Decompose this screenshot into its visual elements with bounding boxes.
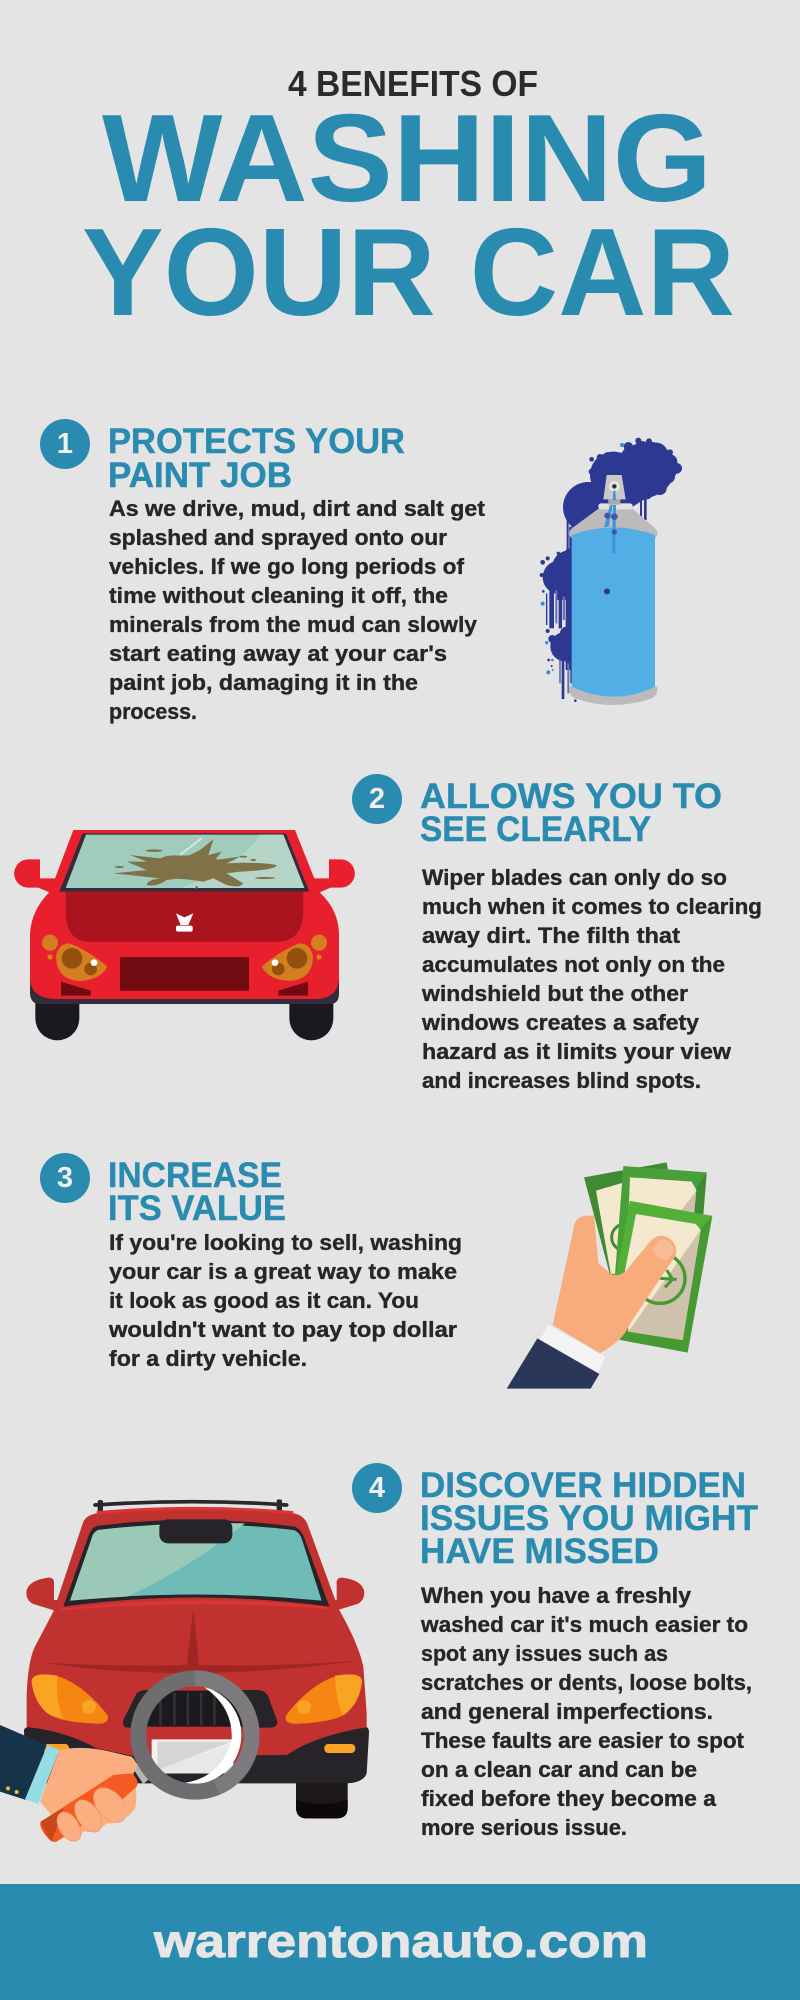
- number badge 4: [352, 1463, 402, 1513]
- body text 3: wouldn't want to pay top dollar: [108, 1317, 457, 1342]
- body text 4: on a clean car and can be: [421, 1757, 697, 1782]
- body text 2: [421, 865, 762, 1093]
- number badge 4: 4: [369, 1472, 385, 1504]
- body text 1: process.: [109, 699, 197, 724]
- title: [82, 63, 735, 342]
- panel: discover hidden issues: [0, 1463, 758, 1845]
- body text 1: splashed and sprayed onto our: [109, 525, 447, 550]
- footer bar with website: [0, 1884, 800, 2000]
- body text 1: paint job, damaging it in the: [109, 670, 418, 695]
- body text 4: scratches or dents, loose bolts,: [421, 1670, 752, 1695]
- number badge 1: [40, 419, 90, 469]
- body text 4: These faults are easier to spot: [421, 1728, 745, 1753]
- number badge 3: 3: [57, 1162, 73, 1194]
- heading 4: HAVE MISSED: [420, 1532, 659, 1571]
- title: 4 BENEFITS OF: [288, 63, 538, 104]
- body text 1: [109, 496, 486, 724]
- body text 4: more serious issue.: [421, 1815, 627, 1840]
- heading 4: DISCOVER HIDDEN: [420, 1466, 746, 1505]
- heading 1: PROTECTS YOUR: [108, 422, 405, 461]
- body text 3: it look as good as it can. You: [109, 1288, 419, 1313]
- number badge 2: 2: [369, 783, 385, 815]
- body text 1: start eating away at your car's: [109, 641, 447, 666]
- body text 4: [420, 1583, 752, 1840]
- heading 4: [420, 1466, 758, 1571]
- body text 1: minerals from the mud can slowly: [109, 612, 478, 637]
- body text 2: and increases blind spots.: [422, 1068, 701, 1093]
- body text 2: away dirt. The filth that: [422, 923, 681, 948]
- body text 2: windshield but the other: [421, 981, 688, 1006]
- heading 2: [420, 777, 722, 849]
- body text 2: much when it comes to clearing: [422, 894, 762, 919]
- title: WASHING: [102, 90, 712, 228]
- body text 3: your car is a great way to make: [109, 1259, 457, 1284]
- body text 1: As we drive, mud, dirt and salt get: [109, 496, 486, 521]
- heading 1: [108, 422, 405, 495]
- body text 4: and general imperfections.: [421, 1699, 713, 1724]
- panel: increase its value: [40, 1153, 712, 1389]
- body text 3: for a dirty vehicle.: [109, 1346, 307, 1371]
- body text 2: accumulates not only on the: [422, 952, 725, 977]
- body text 4: spot any issues such as: [421, 1641, 668, 1666]
- heading 2: ALLOWS YOU TO: [420, 777, 722, 816]
- body text 4: fixed before they become a: [421, 1786, 717, 1811]
- heading 3: ITS VALUE: [108, 1189, 286, 1228]
- body text 4: washed car it's much easier to: [420, 1612, 748, 1637]
- body text 3: If you're looking to sell, washing: [109, 1230, 462, 1255]
- heading 2: SEE CLEARLY: [420, 810, 651, 849]
- heading 1: PAINT JOB: [108, 456, 292, 495]
- body text 1: vehicles. If we go long periods of: [109, 554, 465, 579]
- icon: red car with muddy windshield: [14, 830, 355, 1040]
- heading 3: INCREASE: [108, 1156, 282, 1195]
- title: YOUR CAR: [82, 204, 735, 342]
- number badge 2: [352, 774, 402, 824]
- heading 3: [108, 1156, 286, 1228]
- body text 1: time without cleaning it off, the: [109, 583, 448, 608]
- panel: allows you to see clearly: [14, 774, 762, 1093]
- heading 4: ISSUES YOU MIGHT: [420, 1499, 758, 1538]
- body text 3: [108, 1230, 462, 1371]
- panel: protects your paint job: [40, 419, 682, 724]
- number badge 1: 1: [57, 428, 73, 460]
- icon: hand holding money: [507, 1162, 712, 1389]
- footer bar with website: warrentonauto.com: [153, 1915, 648, 1967]
- body text 4: When you have a freshly: [421, 1583, 692, 1608]
- icon: red car under magnifying glass: [0, 1499, 369, 1845]
- body text 2: Wiper blades can only do so: [422, 865, 727, 890]
- body text 2: hazard as it limits your view: [422, 1039, 732, 1064]
- body text 2: windows creates a safety: [421, 1010, 700, 1035]
- icon: spray paint can with splatter: [540, 438, 682, 705]
- number badge 3: [40, 1153, 90, 1203]
